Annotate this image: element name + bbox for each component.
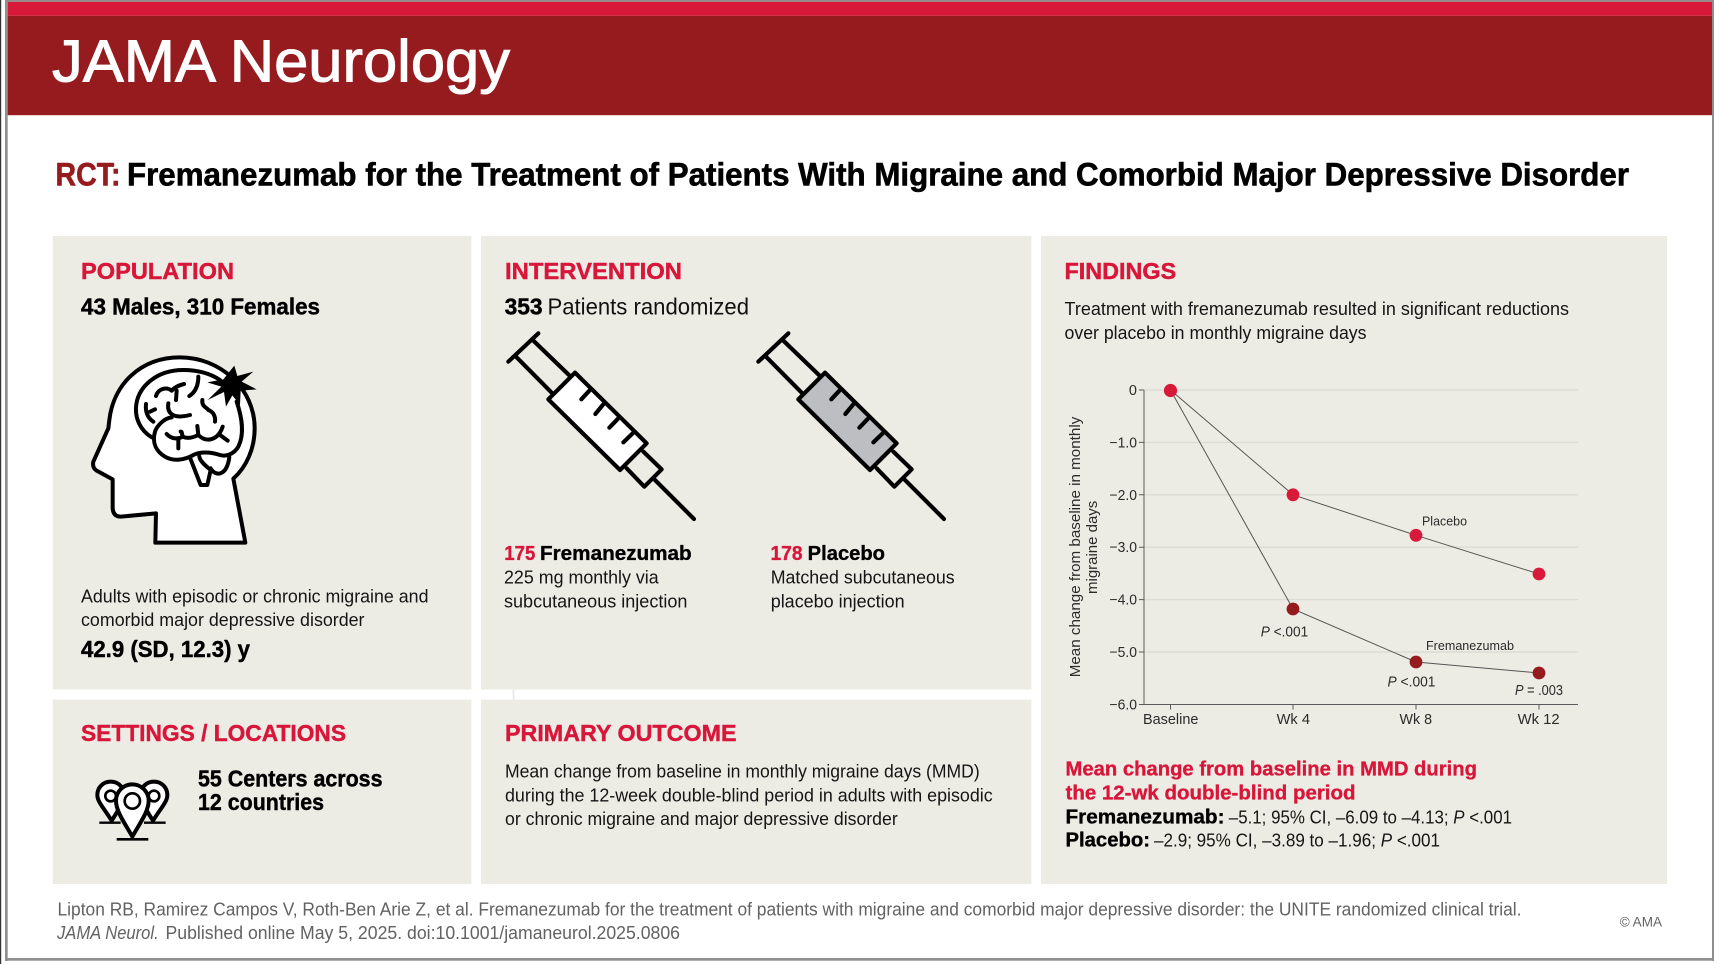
fremanezumab series [1170, 390, 1545, 679]
y axis tick labels: −5.0 [1110, 645, 1137, 661]
line chart: mean change in monthly migraine days [1068, 383, 1578, 728]
placebo result: –2.9; 95% CI, –3.89 to –1.96; P <.001 [1154, 831, 1440, 851]
y axis tick labels: −2.0 [1110, 488, 1137, 504]
header banner [8, 2, 1712, 115]
sex counts: 43 Males, 310 Females [81, 294, 320, 320]
x axis labels [1143, 712, 1560, 728]
population description: comorbid major depressive disorder [81, 610, 364, 630]
findings result heading: Mean change from baseline in MMD during [1066, 759, 1477, 781]
mean age: 42.9 (SD, 12.3) y [81, 636, 250, 662]
citation: Lipton RB, Ramirez Campos V, Roth-Ben Arie Z, et al. Fremanezumab for the treatment of patients with migraine and comorbid major depressive disorder: the UNITE randomized clinical trial. [58, 900, 1522, 920]
x axis labels: Wk 4 [1277, 712, 1310, 728]
placebo arm: Matched subcutaneous [771, 568, 955, 588]
fremanezumab arm: 225 mg monthly via [504, 568, 660, 588]
placebo arm [770, 543, 955, 611]
citation: JAMA Neurol. [56, 923, 159, 943]
x axis labels: Baseline [1143, 712, 1198, 728]
placebo arm: placebo injection [771, 591, 905, 611]
y axis title [1068, 416, 1101, 677]
placebo arm: 178 [770, 543, 802, 565]
y axis tick labels [1110, 383, 1137, 714]
journal name: JAMA Neurology [52, 29, 511, 95]
y axis title: migraine days [1085, 501, 1101, 594]
primary outcome description: Mean change from baseline in monthly migraine days (MMD) [505, 762, 980, 782]
fremanezumab result [1066, 806, 1512, 828]
fremanezumab result: Fremanezumab: [1066, 806, 1224, 828]
fremanezumab arm [504, 543, 692, 611]
centers and countries [198, 765, 382, 815]
fremanezumab arm: Fremanezumab [540, 543, 692, 565]
series labels and P values: Fremanezumab [1426, 638, 1514, 653]
findings summary: Treatment with fremanezumab resulted in significant reductions [1064, 299, 1569, 319]
y axis title: Mean change from baseline in monthly [1068, 416, 1084, 677]
citation: Published online May 5, 2025. doi:10.1001/jamaneurol.2025.0806 [166, 923, 680, 943]
title: RCT: [56, 157, 120, 193]
population description: Adults with episodic or chronic migraine and [81, 586, 428, 606]
fremanezumab arm: 175 [504, 543, 535, 565]
icon: three map pins [97, 782, 167, 839]
primary outcome description [505, 762, 993, 829]
icon: head with brain and migraine burst [93, 357, 257, 543]
icon: syringe fremanezumab [508, 333, 694, 519]
placebo result: Placebo: [1066, 830, 1150, 852]
series labels and P values: P = .003 [1515, 683, 1563, 699]
y axis tick labels: −4.0 [1110, 593, 1137, 609]
series labels and P values: P <.001 [1388, 675, 1436, 691]
primary outcome description: or chronic migraine and major depressive disorder [505, 809, 898, 829]
findings result heading: the 12-wk double-blind period [1066, 782, 1356, 804]
series labels and P values [1261, 514, 1563, 699]
series labels and P values: P <.001 [1261, 625, 1308, 641]
panel: population [53, 236, 471, 690]
findings summary: over placebo in monthly migraine days [1064, 323, 1366, 343]
population description [81, 586, 428, 630]
placebo arm: Placebo [808, 543, 885, 565]
x axis labels: Wk 12 [1518, 712, 1560, 728]
findings summary [1064, 299, 1569, 343]
x axis labels: Wk 8 [1400, 712, 1432, 728]
icon: syringe placebo [758, 333, 944, 519]
fremanezumab arm: subcutaneous injection [504, 591, 687, 611]
panel: settings and locations [53, 700, 471, 884]
patients randomized: Patients randomized [548, 294, 749, 320]
findings result heading [1066, 759, 1477, 804]
placebo series [1170, 390, 1545, 580]
findings heading: FINDINGS [1064, 258, 1176, 284]
centers and countries: 55 Centers across [198, 765, 382, 791]
baseline point [1164, 384, 1177, 397]
panel: primary outcome [481, 700, 1032, 884]
fremanezumab result: –5.1; 95% CI, –6.09 to –4.13; P <.001 [1229, 807, 1512, 827]
centers and countries: 12 countries [198, 789, 324, 815]
panel: intervention [481, 236, 1032, 690]
series labels and P values: Placebo [1422, 514, 1467, 528]
panel: findings [1041, 236, 1667, 884]
y axis tick labels: 0 [1129, 383, 1137, 399]
intervention heading: INTERVENTION [505, 258, 682, 284]
y axis tick labels: −6.0 [1110, 698, 1137, 714]
settings heading: SETTINGS / LOCATIONS [81, 720, 346, 746]
patients randomized: 353 [505, 294, 543, 320]
primary outcome heading: PRIMARY OUTCOME [505, 720, 736, 746]
primary outcome description: during the 12-week double-blind period in adults with episodic [505, 786, 993, 806]
copyright: © AMA [1620, 914, 1663, 930]
population heading: POPULATION [81, 258, 234, 284]
citation [56, 900, 1521, 943]
y axis tick labels: −3.0 [1110, 540, 1137, 556]
placebo result [1066, 830, 1440, 852]
y axis tick labels: −1.0 [1110, 435, 1137, 451]
title: Fremanezumab for the Treatment of Patients With Migraine and Comorbid Major Depressive Disorder [127, 157, 1629, 193]
